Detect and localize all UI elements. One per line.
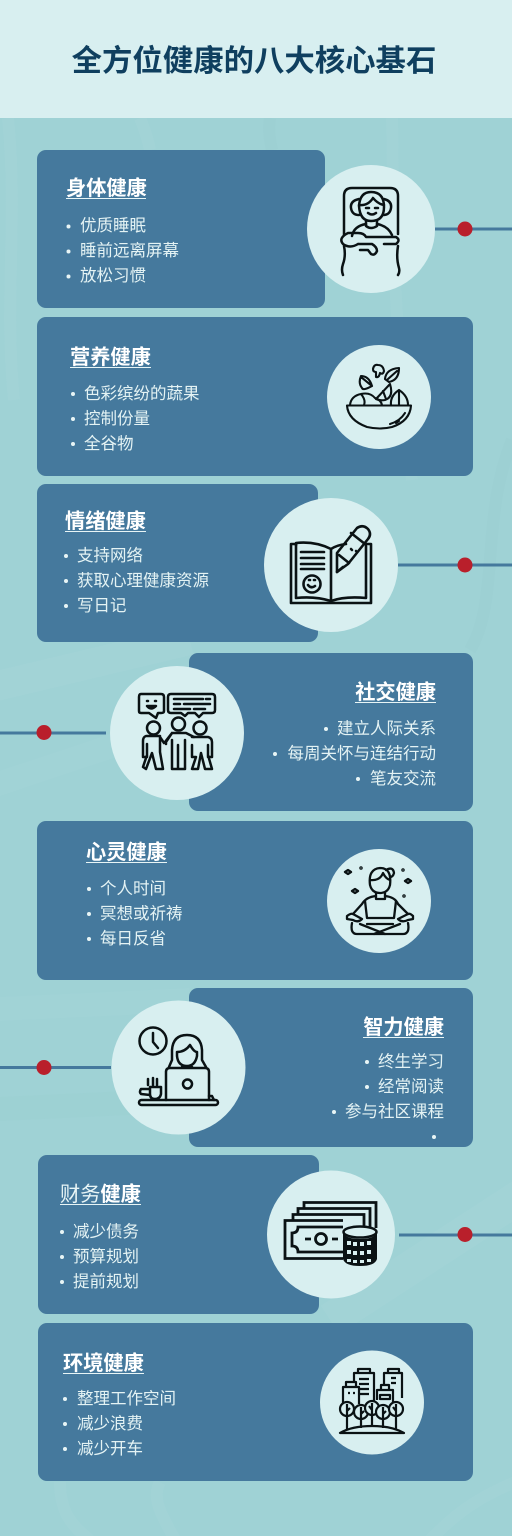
list: physical health: 睡前远离屏幕 [80,241,179,260]
panel: intellectual health [0,988,473,1147]
connector: emotional health [398,558,512,572]
panel: environmental health [38,1323,473,1481]
icon: city with trees [320,1350,424,1454]
list: environmental health: 减少开车 [77,1439,143,1458]
heading: financial health: 财务健康 [60,1182,141,1206]
heading: spiritual health: 心灵健康 [86,840,167,864]
list: financial health: 减少债务 [73,1222,139,1241]
list: nutrition health: 控制份量 [84,409,150,428]
list: spiritual health: 每日反省 [100,929,166,948]
list: environmental health: 减少浪费 [77,1414,143,1433]
list: financial health: 预算规划 [73,1247,139,1266]
connector: intellectual health [0,1060,111,1075]
list: social health: 笔友交流 [370,769,436,788]
connector: physical health [435,222,512,236]
list: emotional health: 获取心理健康资源 [77,571,209,590]
list: environmental health [63,1389,176,1458]
list: emotional health [64,546,209,615]
panel: social health [0,653,473,811]
heading: environmental health: 环境健康 [63,1351,144,1375]
connector: financial health [399,1227,512,1242]
list: emotional health: 支持网络 [77,546,143,565]
panel: spiritual health [37,821,473,980]
list: social health [273,719,436,788]
list: nutrition health: 色彩缤纷的蔬果 [84,384,200,403]
list: physical health: 放松习惯 [80,266,146,285]
icon: sleeping person in bed [307,165,435,293]
panel: physical health [37,150,512,308]
list: social health: 每周关怀与连结行动 [288,744,436,763]
panel: emotional health [37,484,512,642]
panel: financial health [38,1155,512,1314]
icon: meditating person [327,849,431,953]
panel: nutrition health [37,317,473,476]
heading: intellectual health: 智力健康 [363,1015,444,1039]
heading: nutrition health: 营养健康 [70,345,151,369]
list: physical health: 优质睡眠 [80,216,146,235]
icon: person working at laptop [112,1000,246,1134]
icon: journal and pencil [264,498,398,632]
heading: physical health: 身体健康 [66,176,147,200]
list: intellectual health: 终生学习 [378,1052,444,1071]
heading: social health: 社交健康 [355,680,436,704]
title: 全方位健康的八大核心基石 [72,44,436,78]
list: nutrition health: 全谷物 [84,434,134,453]
list: emotional health: 写日记 [77,596,126,615]
list: intellectual health: 经常阅读 [378,1077,444,1096]
list: environmental health: 整理工作空间 [77,1389,176,1408]
icon: salad bowl [327,345,431,449]
list: intellectual health [332,1052,444,1139]
list: social health: 建立人际关系 [337,719,436,738]
list: spiritual health: 冥想或祈祷 [100,904,182,923]
icon: banknotes and coins [267,1170,395,1298]
list: spiritual health [87,879,182,948]
list: financial health: 提前规划 [73,1272,139,1291]
header band with title [0,0,512,118]
list: financial health [60,1222,139,1291]
heading: emotional health: 情绪健康 [65,509,146,533]
list: intellectual health: 参与社区课程 [345,1102,444,1121]
list: spiritual health: 个人时间 [100,879,166,898]
list: physical health [66,216,179,285]
list: nutrition health [71,384,200,453]
connector: social health [0,725,106,740]
icon: three friends talking [110,666,244,800]
